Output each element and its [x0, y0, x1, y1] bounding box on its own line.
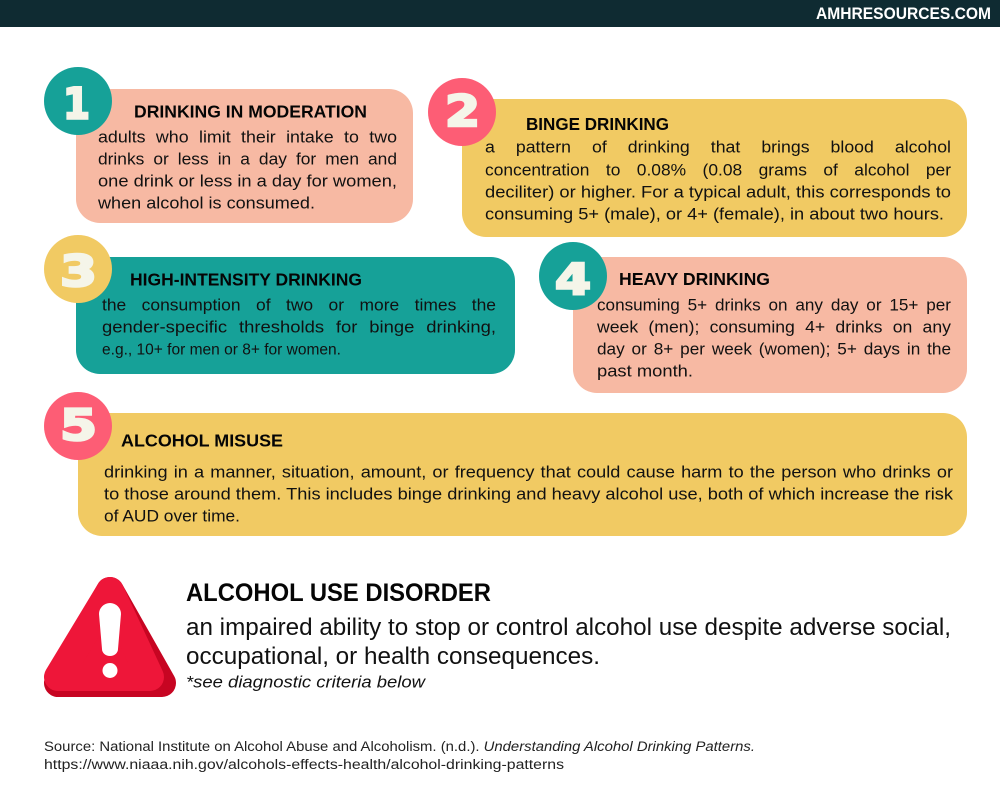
text: disorder definition: an impaired ability to stop or control alcohol use despite adverse social,: [186, 614, 951, 641]
panel: high-intensity drinking: [44, 235, 515, 374]
icon: number 5 badge: [44, 392, 112, 460]
source citation: Source: National Institute on Alcohol Abuse and Alcoholism. (n.d.). Understanding Alcohol Drinking Patterns.: [44, 739, 755, 754]
text: binge definition: consuming 5+ (male), or 4+ (female), in about two hours.: [485, 206, 944, 224]
heading: alcohol use disorder: ALCOHOL USE DISORDER: [186, 579, 491, 607]
text: binge definition: deciliter) or higher. For a typical adult, this corresponds to: [485, 184, 951, 202]
icon: number 3 badge: 3: [60, 247, 97, 297]
source citation: https://www.niaaa.nih.gov/alcohols-effects-health/alcohol-drinking-patterns: [44, 757, 564, 772]
source citation: [44, 739, 755, 772]
icon: number 2 badge: [428, 78, 496, 146]
heading: high-intensity drinking: HIGH-INTENSITY DRINKING: [130, 270, 362, 290]
heading: binge drinking: BINGE DRINKING: [526, 114, 669, 134]
text: misuse definition: of AUD over time.: [104, 508, 240, 526]
text: high-intensity definition: e.g., 10+ for men or 8+ for women.: [102, 342, 341, 358]
text: moderation definition: drinks or less in a day for men and: [98, 150, 397, 168]
text: heavy definition: week (men); consuming 4+ drinks on any: [596, 318, 952, 336]
text: binge definition: [485, 138, 952, 224]
text: disorder definition: occupational, or health consequences.: [186, 643, 600, 670]
icon: number 5 badge: 5: [60, 401, 97, 451]
heading: drinking in moderation: DRINKING IN MODERATION: [134, 102, 367, 122]
text: misuse definition: drinking in a manner, situation, amount, or frequency that could cause harm to the person who drinks or: [104, 464, 954, 482]
header bar: [0, 0, 1000, 27]
heading: heavy drinking: HEAVY DRINKING: [619, 269, 770, 289]
text: heavy definition: day or 8+ per week (women); 5+ days in the: [597, 340, 951, 358]
icon: number 4 badge: [539, 242, 607, 310]
text: moderation definition: adults who limit their intake to two: [98, 128, 397, 146]
heading: alcohol misuse: ALCOHOL MISUSE: [121, 430, 283, 450]
panel: drinking in moderation: [44, 67, 413, 223]
text: high-intensity definition: gender-specific thresholds for binge drinking,: [102, 318, 496, 336]
text: high-intensity definition: the consumption of two or more times the: [102, 296, 496, 314]
panel: heavy drinking: [539, 242, 967, 393]
panel: binge drinking: [428, 78, 967, 237]
panel: alcohol misuse: [44, 392, 967, 536]
text: heavy definition: [596, 296, 952, 380]
text: moderation definition: one drink or less in a day for women,: [98, 172, 397, 190]
icon: number 2 badge: 2: [445, 87, 480, 137]
text: binge definition: concentration to 0.08% (0.08 grams of alcohol per: [485, 162, 952, 180]
text: misuse definition: to those around them. This includes binge drinking and heavy alcohol use, both of which increase the risk: [104, 486, 954, 504]
icon: number 1 badge: 1: [63, 80, 90, 130]
icon: number 1 badge: [44, 67, 112, 135]
icon: number 3 badge: [44, 235, 112, 303]
icon: number 4 badge: 4: [555, 255, 591, 305]
text: moderation definition: [97, 128, 397, 212]
note: diagnostic criteria: *see diagnostic criteria below: [186, 674, 426, 692]
text: heavy definition: past month.: [597, 362, 693, 380]
text: moderation definition: when alcohol is consumed.: [97, 194, 315, 212]
text: misuse definition: [104, 464, 954, 526]
text: binge definition: a pattern of drinking that brings blood alcohol: [485, 138, 951, 156]
text: disorder definition: [186, 614, 951, 670]
text: heavy definition: consuming 5+ drinks on any day or 15+ per: [597, 296, 952, 314]
site name: AMHRESOURCES.COM: [816, 5, 991, 23]
icon: warning triangle: [58, 591, 162, 683]
text: high-intensity definition: [102, 296, 496, 358]
